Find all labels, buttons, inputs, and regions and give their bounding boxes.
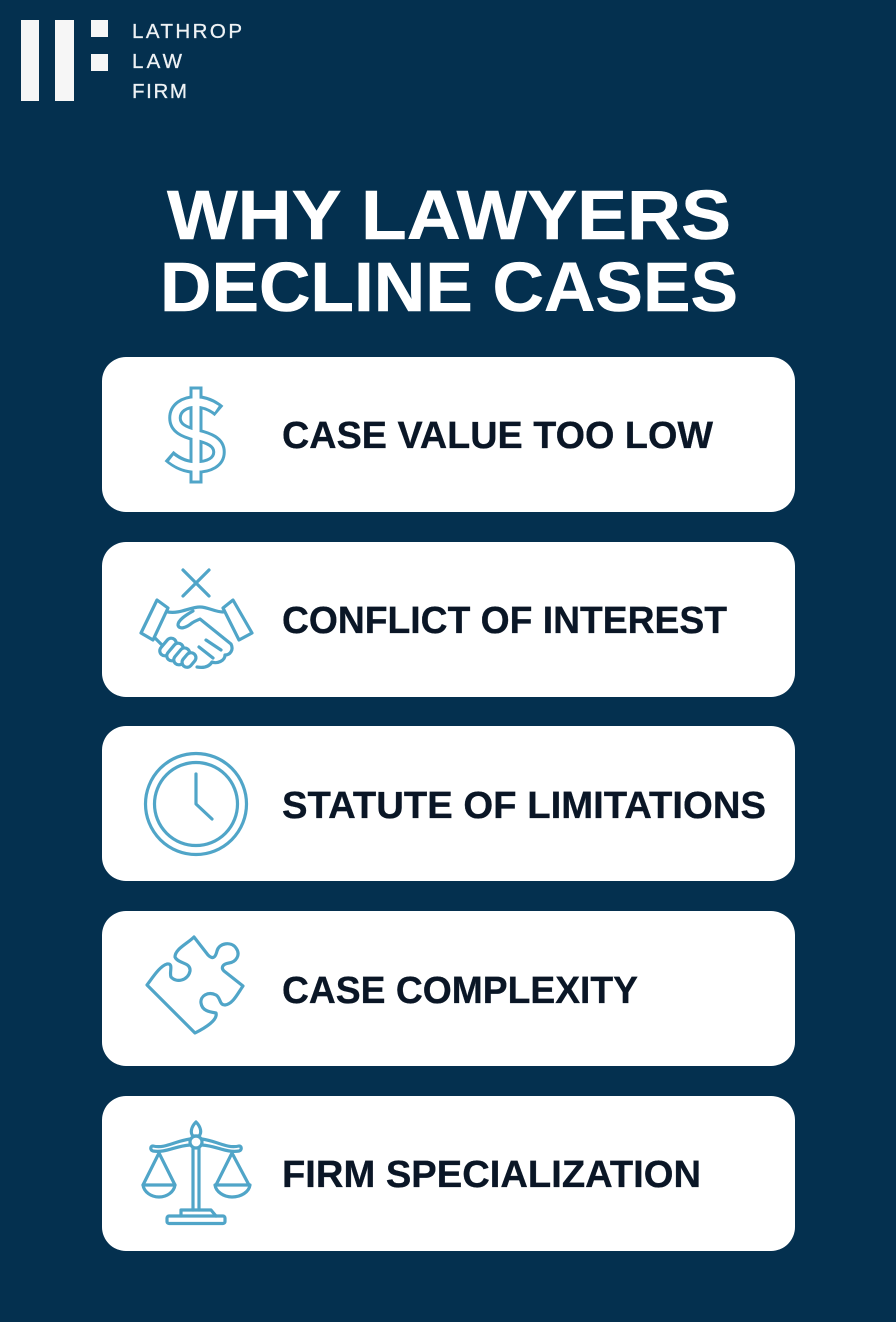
label: CONFLICT OF INTEREST <box>282 600 727 642</box>
panel: case value too low <box>102 357 795 512</box>
panel: statute of limitations <box>102 726 795 881</box>
title <box>160 176 738 326</box>
label: STATUTE OF LIMITATIONS <box>282 785 766 827</box>
logo text: LATHROP <box>132 20 242 43</box>
title: WHY LAWYERS <box>167 176 731 254</box>
label: CASE VALUE TOO LOW <box>282 415 713 457</box>
logo mark <box>21 20 108 101</box>
icon: handshake with cross <box>141 570 252 669</box>
logo text <box>132 20 242 103</box>
icon: dollar sign <box>169 386 219 484</box>
label: FIRM SPECIALIZATION <box>282 1154 701 1196</box>
icon: puzzle piece <box>147 937 243 1033</box>
logo text: FIRM <box>132 80 187 103</box>
logo <box>21 20 242 103</box>
logo text: LAW <box>132 50 183 73</box>
icon: scales of justice <box>143 1122 250 1224</box>
panel: firm specialization <box>102 1096 795 1251</box>
icon: clock <box>146 754 246 854</box>
panel: case complexity <box>102 911 795 1066</box>
label: CASE COMPLEXITY <box>282 970 638 1012</box>
panel: conflict of interest <box>102 542 795 697</box>
title: DECLINE CASES <box>160 248 738 326</box>
